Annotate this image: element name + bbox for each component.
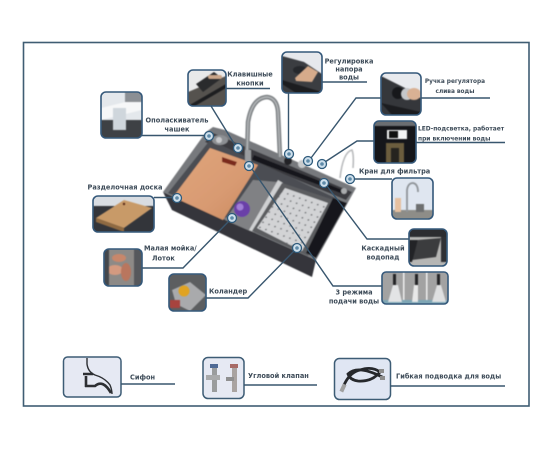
- sink illustration: [163, 97, 356, 277]
- hotspot: cascade waterfall: [320, 178, 328, 188]
- label: angle valve: Угловой клапан: [248, 372, 309, 380]
- label: water pressure control: Регулировка: [325, 58, 373, 66]
- leader: cutting board: [154, 196, 173, 198]
- thumbnail: LED lighting: [374, 121, 416, 163]
- hotspot: small basin tray: [228, 214, 236, 222]
- label: small basin tray: Лоток: [152, 254, 175, 262]
- label: water pressure control: воды: [339, 74, 359, 82]
- thumbnail: small basin tray: [104, 249, 142, 286]
- label: small basin tray: Малая мойка/: [144, 244, 197, 252]
- label: cup rinser: Ополаскиватель: [146, 116, 208, 124]
- leader: LED lighting: [325, 141, 505, 162]
- label: 3 water modes: 3 режима: [335, 288, 373, 296]
- label: drain control knob: слива воды: [436, 89, 474, 95]
- label: drain control knob: Ручка регулятора: [425, 79, 485, 85]
- callout: filter faucet: [346, 168, 433, 219]
- hotspot: 3 water modes: [244, 162, 254, 170]
- hotspot: LED lighting: [318, 160, 326, 168]
- label: LED lighting: LED-подсветка, работает: [418, 126, 505, 132]
- hotspot: cup rinser: [204, 132, 214, 140]
- leader: filter faucet: [354, 178, 392, 180]
- callout: drain control knob: [304, 73, 490, 166]
- callout: angle valve: [203, 358, 317, 398]
- leader: cup rinser: [142, 134, 205, 136]
- callout: small basin tray: [104, 214, 236, 286]
- leader: small basin tray: [142, 221, 229, 268]
- label: water pressure control: [325, 58, 373, 82]
- thumbnail: drain control knob: [381, 73, 421, 115]
- hotspot: filter faucet: [346, 174, 354, 184]
- label: cascade waterfall: водопад: [367, 254, 399, 262]
- thumbnail: cup rinser: [101, 92, 142, 138]
- thumbnail: water pressure control: [282, 52, 322, 93]
- leader: colander: [206, 251, 294, 298]
- callout: colander: [169, 244, 302, 311]
- label: 3 water modes: [329, 288, 379, 306]
- leader: drain control knob: [311, 98, 490, 158]
- label: colander: Коландер: [209, 288, 248, 296]
- thumbnail: 3 water modes: [382, 272, 448, 304]
- leader: keypad buttons: [211, 88, 270, 145]
- leader: flexible water hose: [390, 385, 505, 387]
- outer frame: [24, 42, 529, 406]
- label: filter faucet: Кран для фильтра: [359, 168, 430, 176]
- hotspot: cutting board: [172, 194, 182, 202]
- thumbnail: cutting board: [93, 196, 154, 232]
- thumbnail: angle valve: [203, 358, 244, 398]
- label: 3 water modes: подачи воды: [329, 298, 379, 306]
- label: keypad buttons: [227, 70, 273, 88]
- thumbnail: flexible water hose: [334, 358, 390, 400]
- callout: siphon: [64, 357, 175, 397]
- label: cup rinser: [146, 116, 208, 134]
- label: keypad buttons: кнопки: [236, 80, 264, 88]
- hotspot: water pressure control: [284, 150, 294, 158]
- leader: cascade waterfall: [327, 186, 409, 239]
- label: siphon: Сифон: [130, 374, 155, 382]
- leader: water pressure control: [288, 82, 367, 150]
- thumbnail: cascade waterfall: [409, 229, 447, 266]
- hotspot: keypad buttons: [234, 144, 242, 152]
- callout: water pressure control: [282, 52, 373, 158]
- thumbnail: colander: [169, 274, 206, 311]
- label: cascade waterfall: [361, 244, 405, 262]
- label: LED lighting: при включении воды: [418, 136, 491, 142]
- thumbnail: keypad buttons: [188, 70, 226, 106]
- thumbnail: siphon: [64, 357, 121, 397]
- label: LED lighting: [418, 126, 505, 142]
- hotspot: drain control knob: [304, 156, 312, 166]
- label: cutting board: Разделочная доска: [87, 184, 163, 192]
- label: water pressure control: напора: [335, 66, 363, 74]
- callout: 3 water modes: [244, 162, 448, 306]
- callout: flexible water hose: [334, 358, 505, 400]
- label: flexible water hose: Гибкая подводка для воды: [396, 372, 501, 380]
- leader: angle valve: [244, 384, 317, 386]
- label: small basin tray: [144, 244, 197, 262]
- callout: keypad buttons: [188, 70, 273, 152]
- label: keypad buttons: Клавишные: [227, 70, 273, 78]
- callout: cutting board: [87, 184, 182, 232]
- label: drain control knob: [425, 79, 485, 95]
- callout: cup rinser: [101, 92, 214, 140]
- leader: 3 water modes: [252, 169, 382, 286]
- label: cup rinser: чашек: [165, 126, 190, 134]
- thumbnail: filter faucet: [392, 178, 433, 219]
- label: cascade waterfall: Каскадный: [361, 244, 405, 252]
- callout: cascade waterfall: [320, 178, 447, 266]
- leader: siphon: [121, 383, 175, 385]
- callout: LED lighting: [318, 121, 505, 168]
- hotspot: colander: [292, 244, 302, 252]
